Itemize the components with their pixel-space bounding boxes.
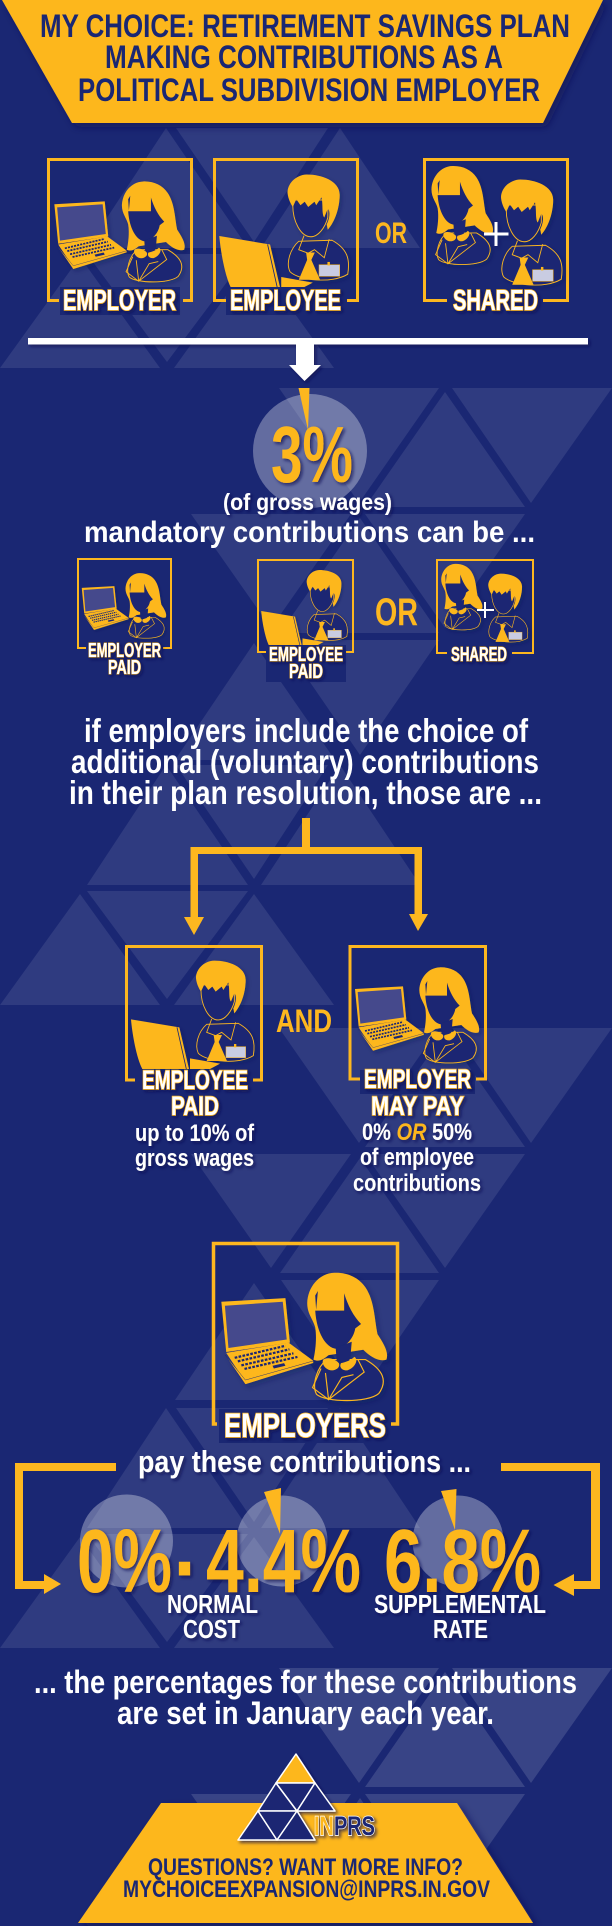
label: shared small: SHARED bbox=[451, 644, 507, 666]
label: employer may pay bbox=[364, 1064, 471, 1121]
label: supplemental rate: SUPPLEMENTAL bbox=[374, 1589, 546, 1619]
text: employer match: contributions bbox=[353, 1170, 481, 1197]
label: normal cost bbox=[167, 1589, 258, 1644]
label: employer paid: PAID bbox=[108, 657, 141, 679]
text: employer match: 0% OR 50% bbox=[362, 1119, 472, 1146]
label: supplemental rate: RATE bbox=[433, 1614, 488, 1644]
footer banner bbox=[78, 1754, 533, 1923]
icon: employer with laptop bbox=[54, 181, 185, 282]
or text small row: OR bbox=[375, 591, 418, 634]
numbers: normal cost range and supplemental rate: - bbox=[178, 1512, 191, 1612]
label: supplemental rate bbox=[374, 1589, 546, 1644]
label: employer paid: EMPLOYER bbox=[88, 640, 161, 662]
arrow: white bar and down arrow bbox=[28, 338, 588, 381]
numbers: normal cost range and supplemental rate: 0% bbox=[77, 1512, 172, 1612]
icon: employee with laptop bbox=[219, 174, 349, 288]
logo: INPRS triangle bbox=[238, 1754, 335, 1840]
and text: AND bbox=[276, 1003, 332, 1039]
arrow: right bracket bbox=[501, 1463, 600, 1596]
panel: employee paid large bbox=[126, 946, 262, 1172]
label: employer may pay: MAY PAY bbox=[371, 1091, 464, 1121]
icon: shared small bbox=[441, 564, 528, 642]
text: employer match bbox=[353, 1119, 481, 1197]
label: employee paid: PAID bbox=[289, 661, 323, 683]
label: employee paid bbox=[269, 644, 343, 683]
text: voluntary contributions paragraph: if employers include the choice of bbox=[84, 712, 529, 749]
text: mandatory contributions: mandatory contributions can be ... bbox=[84, 516, 535, 549]
label: shared: SHARED bbox=[453, 285, 538, 317]
text: contact: MYCHOICEEXPANSION@INPRS.IN.GOV bbox=[123, 1876, 490, 1903]
text: voluntary contributions paragraph bbox=[69, 712, 542, 811]
label: employers: EMPLOYERS bbox=[224, 1407, 386, 1445]
label: employee paid bbox=[142, 1065, 248, 1121]
panel: employee paid bbox=[258, 560, 353, 683]
text: employer match: of employee bbox=[360, 1144, 474, 1171]
icon: employer small bbox=[82, 573, 166, 638]
arrow: left bracket bbox=[15, 1463, 116, 1594]
icon: employee small bbox=[261, 570, 347, 646]
text: contact: QUESTIONS? WANT MORE INFO? bbox=[148, 1854, 463, 1881]
label: normal cost: COST bbox=[183, 1614, 240, 1644]
or text: OR bbox=[375, 217, 407, 250]
header banner bbox=[2, 0, 603, 123]
icon: employer large bbox=[355, 967, 479, 1063]
text: percentages set in January: are set in January each year. bbox=[117, 1695, 494, 1731]
label: employee: EMPLOYEE bbox=[230, 285, 341, 317]
label: employer: EMPLOYER bbox=[63, 285, 176, 317]
text: contact bbox=[123, 1854, 490, 1903]
text: up to 10 percent bbox=[135, 1120, 255, 1172]
panel: employer may pay bbox=[350, 946, 486, 1197]
arrow: branching arrows bbox=[184, 818, 428, 935]
icon: employers bbox=[221, 1273, 387, 1401]
text: pay these contributions: pay these contributions ... bbox=[138, 1444, 471, 1479]
number: 3 percent: 3% bbox=[271, 410, 353, 499]
text: voluntary contributions paragraph: in their plan resolution, those are ... bbox=[69, 774, 542, 811]
chart: pies bbox=[80, 1488, 504, 1588]
label: employer may pay: EMPLOYER bbox=[364, 1064, 471, 1094]
panel: shared small bbox=[437, 560, 533, 666]
numbers: normal cost range and supplemental rate: 6.8% bbox=[384, 1512, 541, 1612]
numbers: normal cost range and supplemental rate bbox=[77, 1512, 541, 1612]
title: MAKING CONTRIBUTIONS AS A bbox=[105, 39, 503, 75]
label: employer paid bbox=[88, 640, 161, 679]
panel: employee bbox=[214, 160, 358, 317]
panel: employers bbox=[214, 1244, 398, 1445]
panel: employer paid bbox=[78, 559, 171, 679]
logo: INPRS wordmark: INPRS bbox=[314, 1811, 375, 1841]
icon: employee large bbox=[131, 961, 254, 1069]
panel: employer bbox=[48, 160, 192, 317]
text: up to 10 percent: gross wages bbox=[135, 1145, 254, 1172]
label: employee paid: EMPLOYEE bbox=[269, 644, 343, 666]
text: of gross wages: (of gross wages) bbox=[223, 489, 392, 515]
text: percentages set in January bbox=[34, 1664, 577, 1731]
numbers: normal cost range and supplemental rate: 4.4% bbox=[206, 1512, 361, 1612]
label: employee paid: PAID bbox=[171, 1091, 219, 1121]
title bbox=[40, 8, 570, 108]
label: normal cost: NORMAL bbox=[167, 1589, 258, 1619]
text: up to 10 percent: up to 10% of bbox=[135, 1120, 255, 1147]
chart: 3 percent pie bbox=[253, 388, 367, 508]
panel: shared bbox=[424, 160, 568, 317]
label: employee paid: EMPLOYEE bbox=[142, 1065, 248, 1095]
text: voluntary contributions paragraph: additional (voluntary) contributions bbox=[71, 743, 539, 780]
icon: shared employer and employee bbox=[431, 166, 562, 285]
